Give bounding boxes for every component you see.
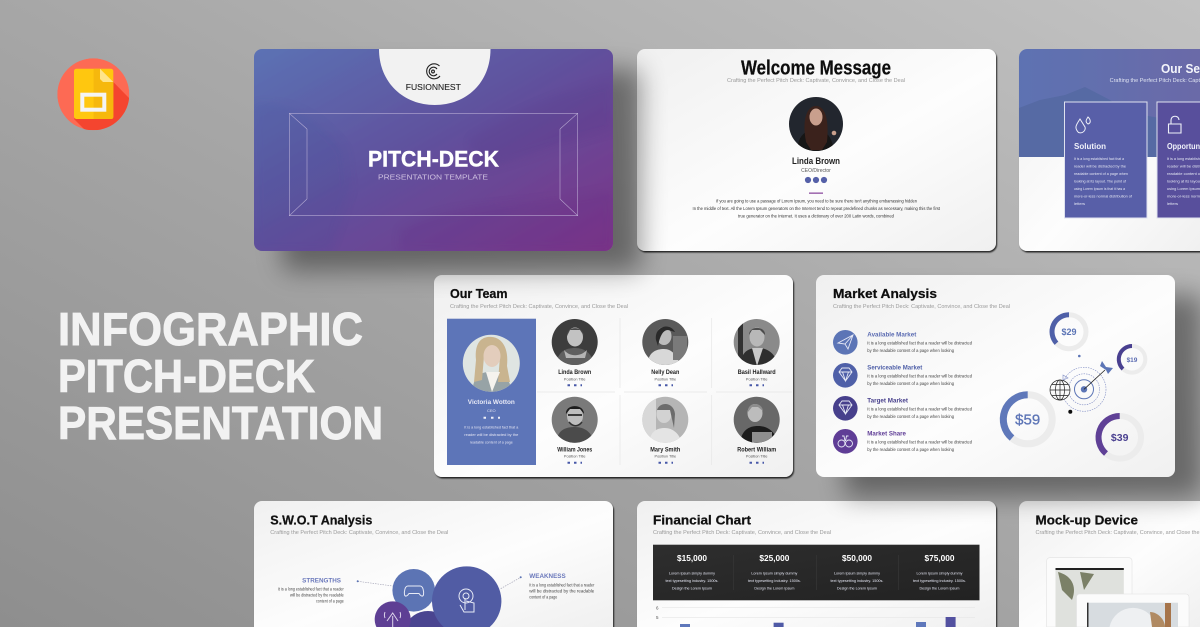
stat: 15000: text typesetting industry. 1500s. <box>666 578 718 583</box>
stat: 15000: Lorem Ipsum simply dummy <box>669 570 715 575</box>
stat: 25000: Design the Lorem Ipsum <box>754 585 794 590</box>
service card: solution: reader will be distracted by the <box>1074 164 1126 168</box>
market item: serviceable: by the readable content of a page when looking <box>867 381 954 386</box>
stat: 15000 <box>666 553 718 590</box>
swot bubble: dark <box>405 611 451 627</box>
market title: Market Analysis <box>833 286 937 301</box>
stat: 50000: Lorem Ipsum simply dummy <box>834 570 880 575</box>
swot bubble: touch <box>432 566 501 627</box>
service card: solution: using Lorem Ipsum is that it has a <box>1074 186 1126 191</box>
stat: 25000: $25,000 <box>759 553 790 563</box>
welcome name: Linda Brown <box>792 156 840 166</box>
featured member panel: Victoria Wotton <box>468 399 515 406</box>
service card: opportunity: reader will be distr <box>1167 164 1200 168</box>
stat: 15000: $15,000 <box>677 553 707 563</box>
team member: Basil Hallward: Position Title <box>746 377 767 381</box>
slide: our services <box>1019 49 1200 251</box>
market item: target: Target Market <box>867 398 909 405</box>
team member: Nelly Dean: Nelly Dean <box>651 370 680 376</box>
donut: 39: $39 <box>1111 432 1129 444</box>
welcome paragraph: true generator on the Internet. It uses a dictionary of over 200 Latin words, combined <box>738 214 894 220</box>
featured member panel: It is a long established fact that a <box>464 425 519 430</box>
service card: opportunity: looking at its layou <box>1167 178 1200 184</box>
welcome title: Welcome Message <box>741 57 891 79</box>
slide: mock-up device <box>1019 501 1200 627</box>
financial subtitle: Crafting the Perfect Pitch Deck: Captivate, Convince, and Close the Deal <box>653 530 831 536</box>
team title: Our Team <box>450 286 508 301</box>
featured member panel: CEO <box>487 408 496 413</box>
logo badge <box>379 49 490 105</box>
market item: serviceable: It is a long established fact that a reader will be distracted <box>867 373 972 378</box>
swot strengths block: will be distracted by the readable <box>290 593 344 598</box>
team member: William Jones: Position Title <box>564 455 585 459</box>
slide: welcome message <box>637 49 996 251</box>
team member: Linda Brown: Position Title <box>564 377 585 381</box>
team member: Linda Brown <box>551 319 599 385</box>
cover title: PITCH-DECK <box>368 147 499 172</box>
swot weakness block: WEAKNESS <box>529 573 566 580</box>
market item: available: Available Market <box>867 332 917 339</box>
swot strengths block: content of a page <box>316 599 344 604</box>
team member: William Jones: William Jones <box>557 447 593 453</box>
services subtitle: Crafting the Perfect Pitch Deck: Capt <box>1110 78 1200 84</box>
icon: target with arrow <box>1062 355 1113 414</box>
photo: Linda Brown portrait <box>789 97 843 152</box>
device: landscape tablet <box>1076 594 1189 627</box>
icon: google slides logo <box>57 58 129 130</box>
welcome paragraph: If you are going to use a passage of Lorem Ipsum, you need to be sure there isn't anything embarrassing hidden <box>716 198 917 204</box>
service card: solution: It is a long established fact that a <box>1074 156 1125 161</box>
service card: solution: Solution <box>1074 142 1106 151</box>
featured member panel: reader will be distracted by the <box>464 432 518 437</box>
bar chart: 6 <box>656 606 659 610</box>
main headline: INFOGRAPHIC <box>58 303 363 355</box>
service card: solution: more-or-less normal distribution of <box>1074 194 1133 198</box>
stat: 25000: text typesetting industry. 1500s. <box>748 578 801 583</box>
welcome role: CEO/Director <box>801 168 831 174</box>
featured member panel <box>447 319 536 465</box>
slide: financial chart <box>637 501 996 627</box>
service card: solution: readable content of a page when <box>1074 171 1128 176</box>
financial title: Financial Chart <box>653 512 752 527</box>
market item: available: It is a long established fact that a reader will be distracted <box>867 340 972 345</box>
device: portrait tablet <box>1047 558 1132 627</box>
swot strengths block: It is a long established fact that a reader <box>278 587 344 592</box>
swot strengths block <box>278 577 344 604</box>
swot strengths block: STRENGTHS <box>302 577 341 584</box>
welcome subtitle: Crafting the Perfect Pitch Deck: Captivate, Convince, and Close the Deal <box>727 78 905 84</box>
stat: 75000 <box>913 553 966 590</box>
market item: share: It is a long established fact that a reader will be distracted <box>867 439 972 444</box>
service card: solution: looking at its layout. The point of <box>1074 178 1127 184</box>
team member: Linda Brown: Linda Brown <box>558 370 591 376</box>
market item: target <box>833 396 972 421</box>
market item: share: by the readable content of a page when looking <box>867 447 954 452</box>
stat: 50000 <box>830 553 884 590</box>
donut: 29: $29 <box>1061 327 1077 337</box>
cover subtitle: PRESENTATION TEMPLATE <box>378 173 488 182</box>
services header band <box>1019 49 1200 157</box>
donut: 59: $59 <box>1015 412 1040 429</box>
swot weakness block: It is a long established fact that a reader <box>529 582 595 587</box>
stat: 75000: Design the Lorem Ipsum <box>920 585 960 590</box>
swot title: S.W.O.T Analysis <box>270 512 372 527</box>
swot weakness block: will be distracted by the readable <box>529 588 595 593</box>
service card: opportunity <box>1157 102 1200 218</box>
stat: 75000: Lorem Ipsum simply dummy <box>916 570 963 575</box>
market item: available: by the readable content of a page when looking <box>867 348 954 353</box>
donut: 59 <box>1003 395 1052 444</box>
market item: target: It is a long established fact that a reader will be distracted <box>867 406 972 411</box>
welcome paragraph: In the middle of text. All the Lorem Ipsum generators on the Internet tend to repeat predefined chunks as necessary, making this the first <box>693 206 941 212</box>
cover frame <box>289 113 578 216</box>
market item: share <box>833 429 972 454</box>
icon: open padlock <box>1168 116 1181 133</box>
main headline: PRESENTATION <box>58 397 383 449</box>
featured member panel: readable content of a page <box>470 440 513 445</box>
stat: 50000: text typesetting industry. 1500s. <box>830 578 884 583</box>
arrow: strengths <box>357 580 393 586</box>
stat: 75000: text typesetting industry. 1500s. <box>913 578 966 583</box>
welcome paragraph <box>693 198 941 220</box>
team subtitle: Crafting the Perfect Pitch Deck: Captivate, Convince, and Close the Deal <box>450 304 628 310</box>
main headline: PITCH-DECK <box>58 350 315 402</box>
social icons <box>805 177 827 183</box>
slide: our team <box>434 275 793 477</box>
stat: 25000 <box>748 553 801 590</box>
market item: serviceable: Serviceable Market <box>867 365 923 372</box>
team member: Mary Smith <box>642 396 690 463</box>
team member: Robert William: Robert William <box>737 447 776 453</box>
market item: share: Market Share <box>867 431 906 438</box>
stat: 50000: Design the Lorem Ipsum <box>837 585 877 590</box>
mockup title: Mock-up Device <box>1036 512 1138 527</box>
stat: 50000: $50,000 <box>842 553 872 563</box>
donut: 39 <box>1098 416 1141 459</box>
bar chart: 5 <box>656 615 659 620</box>
donut: 19: $19 <box>1127 357 1138 364</box>
swot weakness block: content of a page <box>529 594 558 599</box>
main headline <box>58 303 383 449</box>
team member: Mary Smith: Mary Smith <box>650 447 681 453</box>
market item: serviceable <box>833 363 972 388</box>
swot weakness block <box>529 573 595 599</box>
service card: solution <box>1064 102 1147 218</box>
slide: market analysis <box>816 275 1175 477</box>
stat: 25000: Lorem Ipsum simply dummy <box>751 570 797 575</box>
logo badge: FUSIONNEST <box>406 82 461 92</box>
icon: globe <box>1050 380 1070 400</box>
market item: target: by the readable content of a page when looking <box>867 414 954 419</box>
service card: opportunity: letters <box>1167 201 1178 206</box>
team member: Basil Hallward <box>733 319 781 385</box>
team member: Basil Hallward: Basil Hallward <box>738 370 776 376</box>
service card: opportunity: using Lorem Ipsum <box>1167 186 1200 191</box>
service card: opportunity: more-or-less norm <box>1167 194 1200 198</box>
service card: solution: letters <box>1074 201 1085 206</box>
donut: 29 <box>1052 315 1086 349</box>
team member: Nelly Dean: Position Title <box>655 377 676 381</box>
mockup subtitle: Crafting the Perfect Pitch Deck: Captivate, Convince, and Close the <box>1036 530 1200 536</box>
market item: available <box>833 330 972 355</box>
team member: Robert William: Position Title <box>746 455 767 459</box>
icon: water drops <box>1076 117 1090 133</box>
team member: William Jones <box>551 396 599 463</box>
stat: 75000: $75,000 <box>924 553 955 563</box>
swot bubble: signal <box>375 601 411 627</box>
slide: pitch-deck cover <box>254 49 613 251</box>
cover texture <box>254 80 613 251</box>
market subtitle: Crafting the Perfect Pitch Deck: Captivate, Convince, and Close the Deal <box>833 304 1010 310</box>
slide: S.W.O.T analysis <box>254 501 613 627</box>
stat: 15000: Design the Lorem Ipsum <box>672 585 712 590</box>
dark stat panel <box>653 545 980 600</box>
arrow: weakness <box>501 576 522 589</box>
team member: Nelly Dean <box>642 319 690 385</box>
team member: Robert William <box>733 396 781 463</box>
swot subtitle: Crafting the Perfect Pitch Deck: Captivate, Convince, and Close the Deal <box>270 530 448 536</box>
bar chart <box>656 606 975 627</box>
team member: Mary Smith: Position Title <box>655 455 676 459</box>
photo: victoria <box>462 334 522 394</box>
swot bubble: gamepad <box>392 569 435 612</box>
service card: opportunity: readable content o <box>1167 171 1200 176</box>
icon: fusionnest mark <box>427 64 440 79</box>
donut: 19 <box>1119 346 1145 373</box>
